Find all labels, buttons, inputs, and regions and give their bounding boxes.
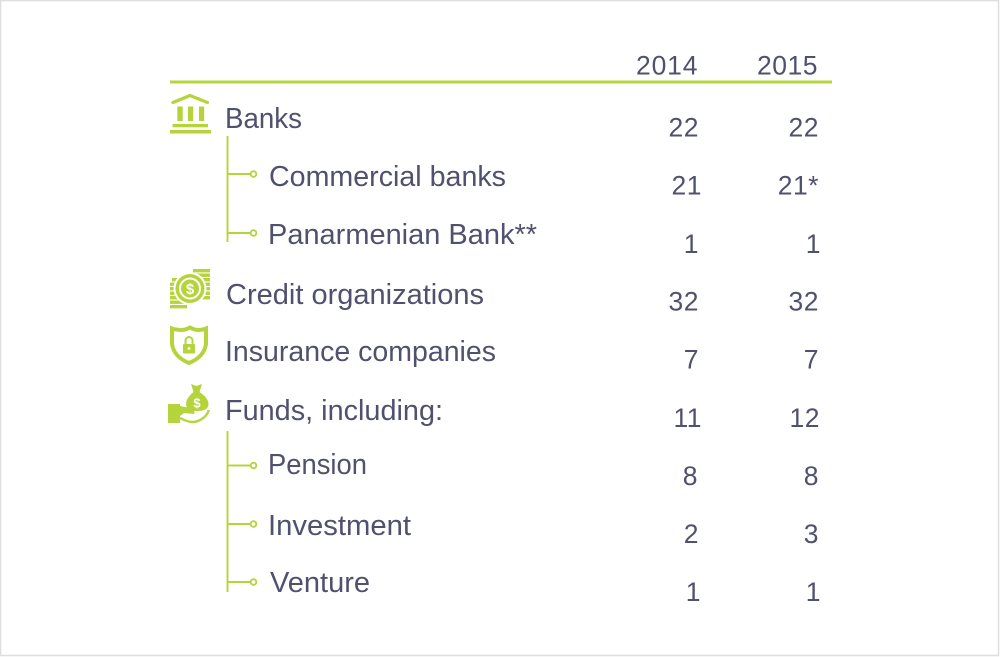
tree connector: banks: [228, 136, 256, 242]
icon: hand with money bag: $: [193, 396, 201, 410]
row labels: Banks: [225, 103, 302, 135]
values: 2015: 12: [790, 403, 820, 433]
row labels: Insurance companies: [225, 336, 496, 368]
values: 2014: 11: [673, 403, 702, 433]
row labels: Panarmenian Bank**: [268, 219, 537, 251]
values: 2014: 8: [683, 461, 698, 491]
values: 2014: [669, 112, 702, 607]
values: 2015: 3: [804, 519, 819, 549]
values: 2014: 21: [672, 170, 702, 200]
icon: coins: [170, 269, 210, 308]
values: 2014: 2: [684, 519, 699, 549]
row labels: Investment: [268, 510, 411, 542]
values: 2015: 22: [789, 112, 819, 142]
values: 2015: 32: [789, 286, 819, 316]
values: 2015: [778, 112, 821, 607]
values: 2014: 7: [684, 344, 699, 374]
tree connector: funds: [228, 431, 256, 592]
row labels: Venture: [270, 567, 370, 599]
column headers: [636, 50, 818, 80]
icon: bank: [170, 96, 211, 134]
values: 2015: 21*: [778, 170, 819, 200]
values: 2015: 8: [804, 461, 819, 491]
row labels: Credit organizations: [226, 279, 484, 311]
icon: hand with money bag: [168, 384, 209, 423]
column headers: 2015: [757, 50, 818, 80]
row labels: Commercial banks: [269, 161, 506, 193]
row labels: Pension: [268, 449, 367, 481]
values: 2015: 1: [806, 229, 821, 259]
values: 2015: 7: [804, 344, 819, 374]
icon: shield with lock: [172, 328, 206, 363]
row labels: [225, 103, 537, 599]
values: 2014: 32: [669, 286, 699, 316]
icon: coins: $: [186, 281, 195, 298]
values: 2014: 22: [669, 112, 699, 142]
row labels: Funds, including:: [225, 395, 443, 427]
values: 2014: 1: [684, 229, 699, 259]
values: 2015: 1: [806, 577, 821, 607]
values: 2014: 1: [686, 577, 701, 607]
column headers: 2014: [636, 50, 698, 80]
